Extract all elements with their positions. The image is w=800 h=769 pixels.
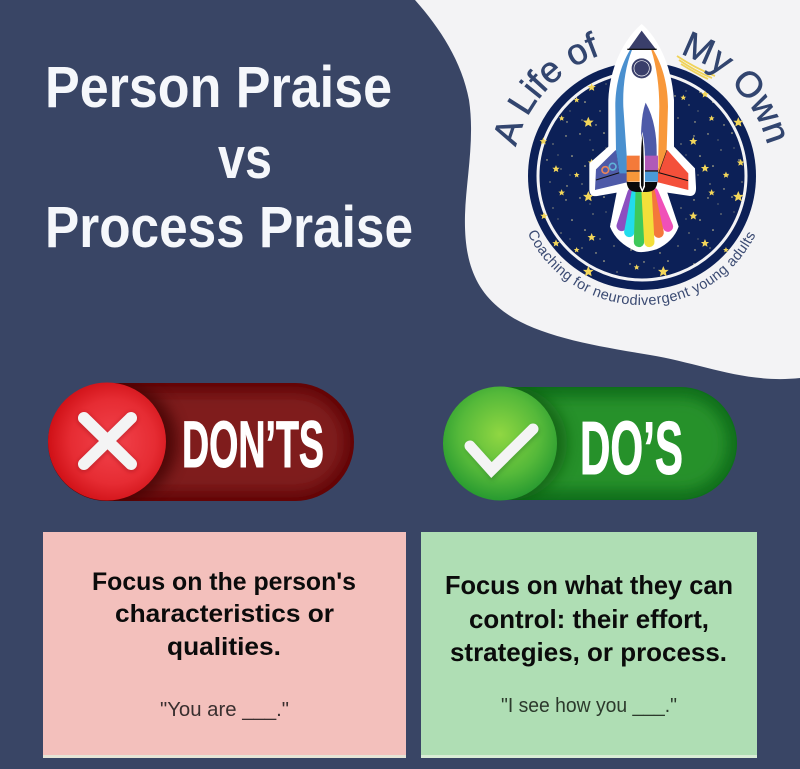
don'ts heading: Focus on the person's bbox=[92, 568, 356, 596]
right orange stripe bbox=[651, 50, 668, 173]
label: don'ts: DON’TS bbox=[182, 407, 324, 481]
panel: don'ts card bbox=[43, 532, 406, 758]
logo background blob bbox=[415, 0, 800, 379]
button: do's bbox=[443, 386, 737, 500]
right fin bbox=[657, 150, 688, 190]
logo text: A Life of: A Life of bbox=[495, 30, 598, 148]
do's heading bbox=[445, 570, 733, 667]
do's example: "I see how you ___." bbox=[501, 695, 677, 717]
yellow underline swoosh bbox=[677, 56, 715, 79]
red circle bbox=[48, 382, 166, 500]
title bbox=[45, 55, 413, 260]
rocket bbox=[589, 24, 696, 252]
title: Person Praise bbox=[45, 55, 392, 120]
centre fin bbox=[641, 103, 657, 156]
flames bbox=[622, 193, 668, 242]
red pill bbox=[48, 382, 354, 502]
icon: check mark bbox=[470, 429, 534, 473]
icon: x mark bbox=[84, 418, 131, 465]
left fin bbox=[595, 150, 628, 190]
button: don'ts bbox=[48, 382, 354, 502]
infinity symbol bbox=[602, 163, 616, 173]
do's heading: Focus on what they can bbox=[445, 570, 733, 600]
stars bbox=[540, 83, 744, 276]
window bbox=[632, 59, 651, 78]
logo text: My Own: My Own bbox=[682, 31, 784, 144]
central black sliver bbox=[640, 132, 645, 193]
don'ts heading: qualities. bbox=[167, 633, 281, 661]
logo tagline: Coaching for neurodivergent young adults bbox=[529, 230, 755, 306]
nose cone bbox=[628, 31, 656, 49]
logo: A Life of My Own bbox=[495, 24, 784, 306]
title: Process Praise bbox=[45, 195, 413, 260]
don'ts heading: characteristics or bbox=[115, 600, 334, 628]
green circle bbox=[443, 386, 557, 500]
engine bbox=[627, 182, 657, 192]
colour band bbox=[627, 156, 642, 171]
don'ts example: "You are ___." bbox=[160, 699, 289, 721]
green pill bbox=[443, 386, 737, 500]
panel: do's card bbox=[421, 532, 757, 758]
title: vs bbox=[218, 126, 272, 191]
do's heading: control: their effort, bbox=[469, 604, 709, 634]
rocket sticker outline bbox=[589, 24, 696, 252]
label: do's: DO’S bbox=[580, 406, 683, 490]
don'ts heading bbox=[92, 568, 356, 661]
do's heading: strategies, or process. bbox=[450, 637, 727, 667]
left blue stripe bbox=[615, 50, 632, 173]
starry badge circle bbox=[528, 62, 756, 290]
